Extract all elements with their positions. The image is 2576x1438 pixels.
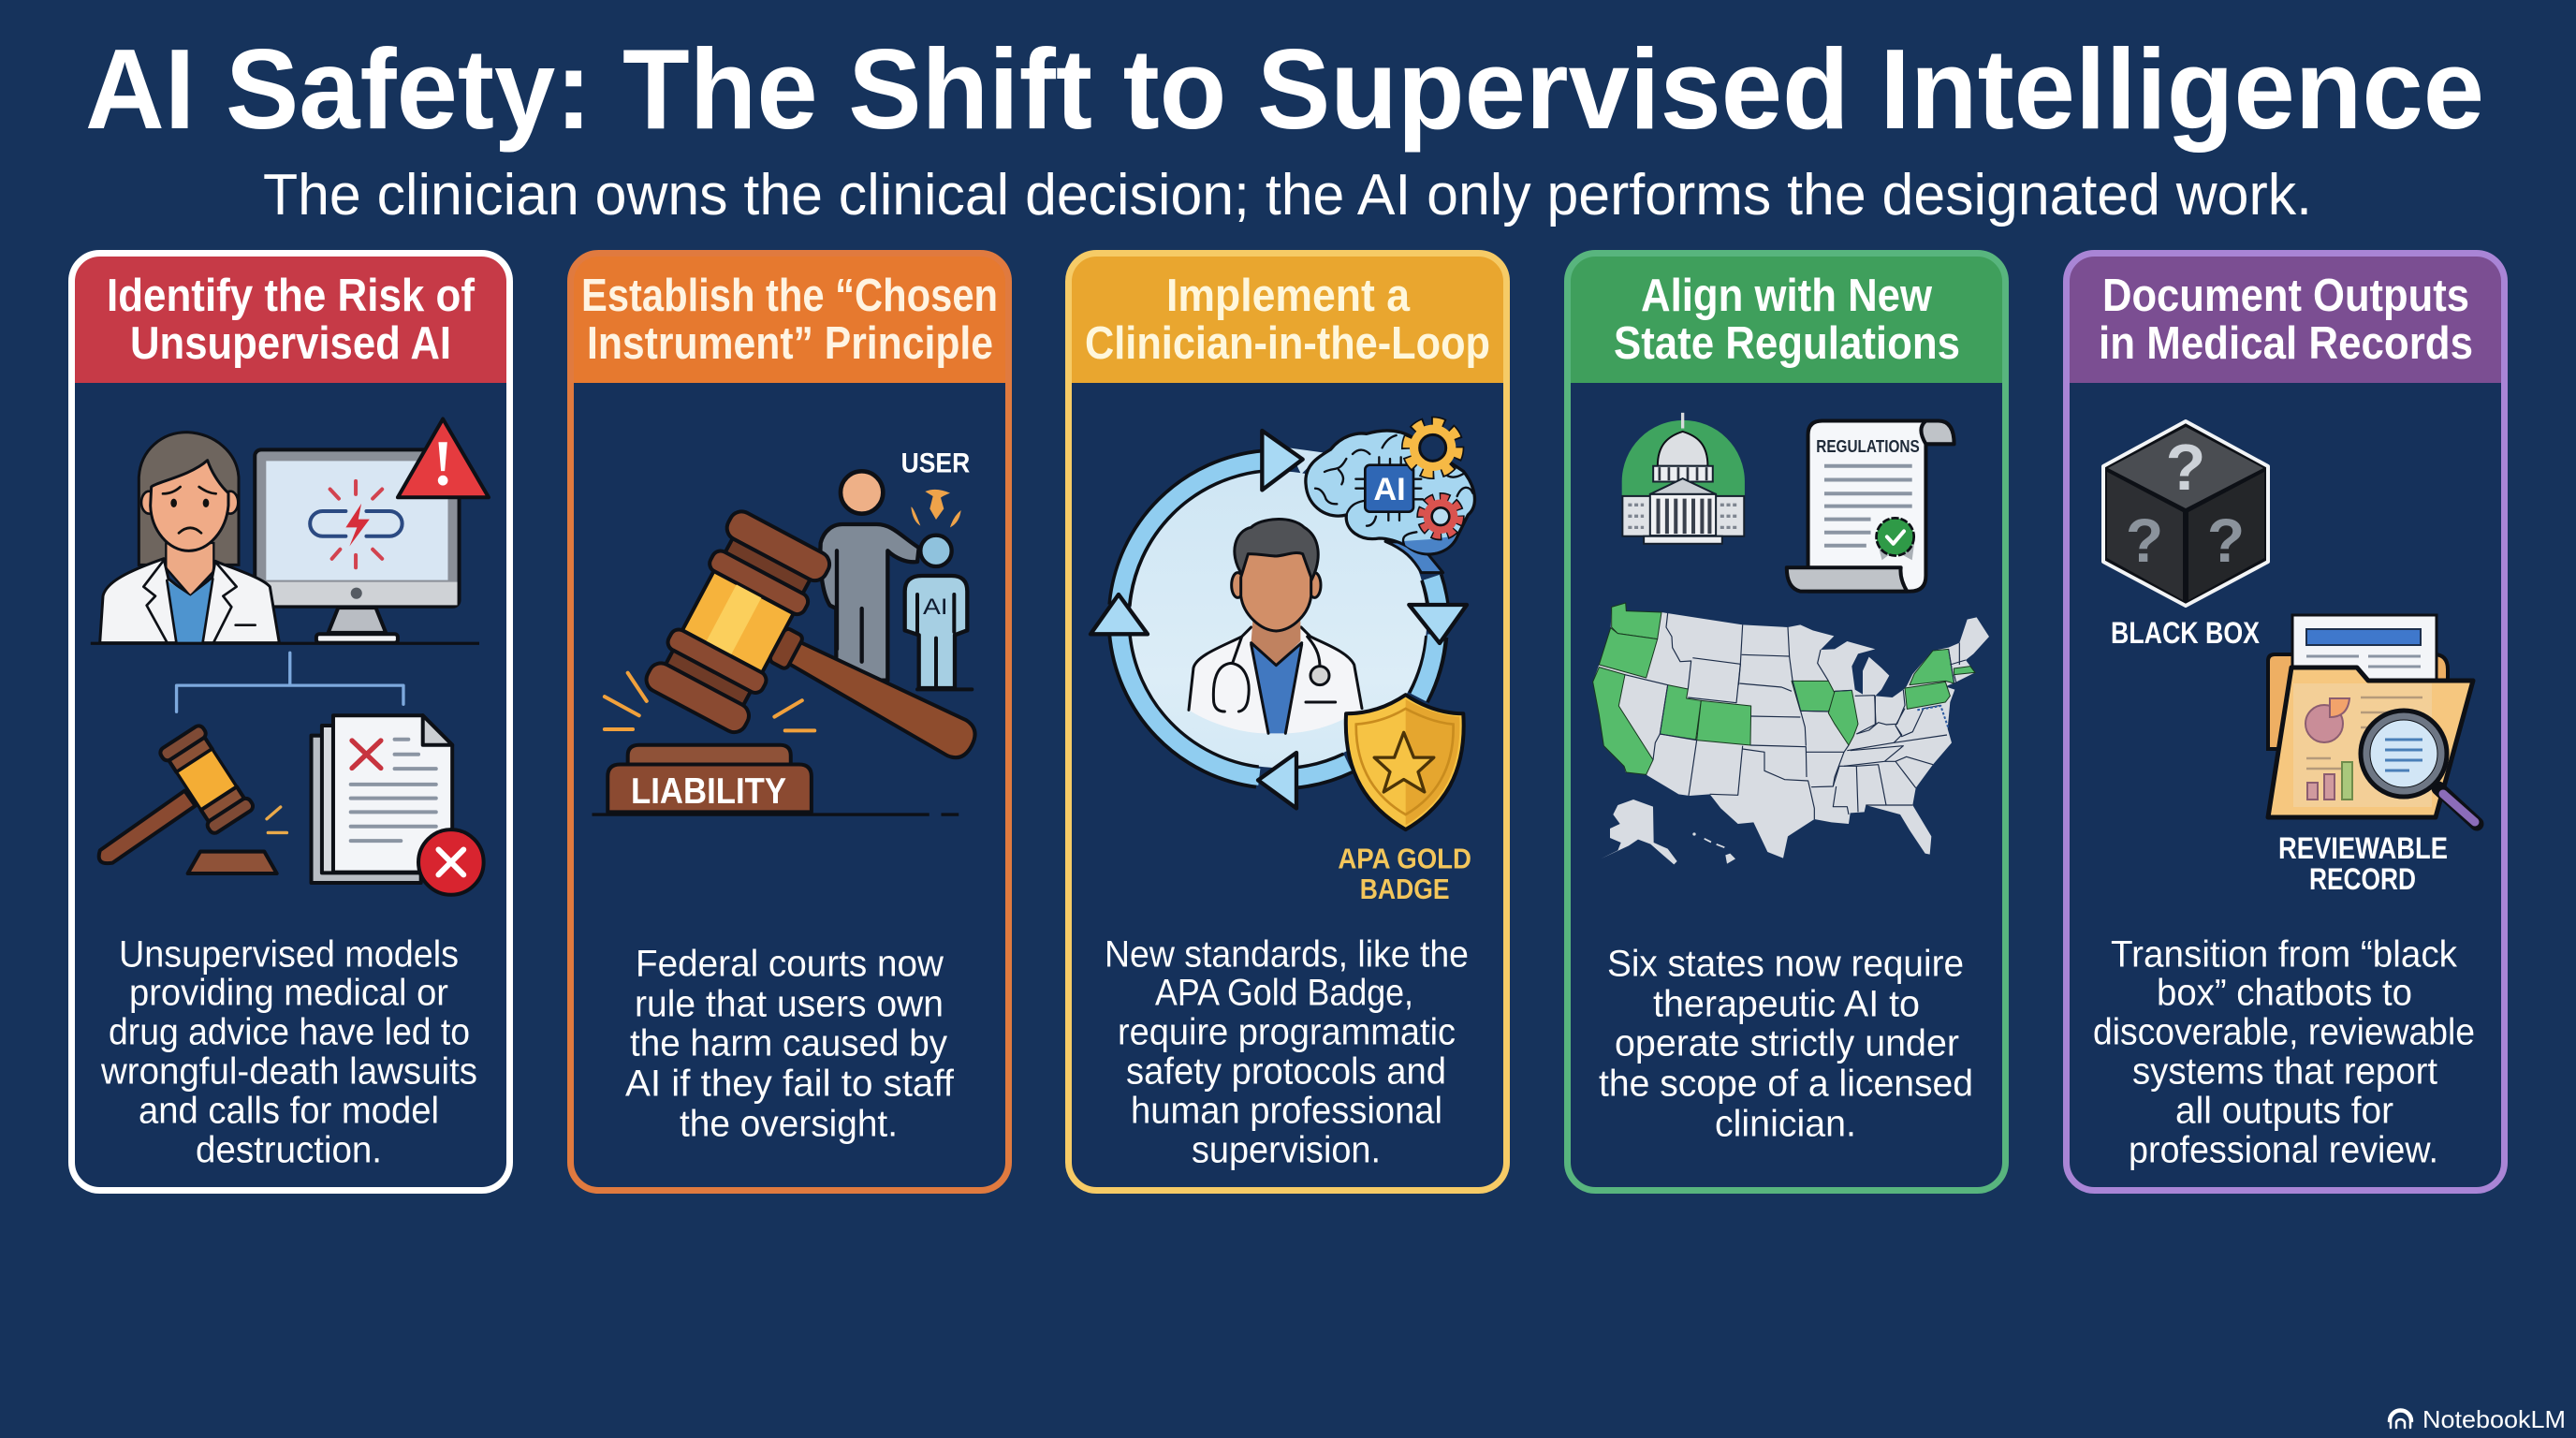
header band: yellow: [1068, 253, 1507, 383]
body text: APA Gold Badge,: [1155, 972, 1413, 1013]
heading: Implement a: [1166, 271, 1411, 321]
body text: safety protocols and: [1126, 1050, 1446, 1092]
icon: capitol building: [1622, 413, 1745, 544]
body text: the scope of a licensed: [1599, 1064, 1973, 1105]
body text: destruction.: [196, 1129, 382, 1170]
heading: [2099, 271, 2473, 369]
heading: Instrument” Principle: [587, 318, 993, 369]
body text: require programmatic: [1118, 1011, 1456, 1052]
map: United States with highlighted states: [1593, 603, 1989, 864]
body text: [625, 944, 955, 1144]
heading: [107, 271, 476, 369]
body text: systems that report: [2132, 1050, 2437, 1092]
icon: black box: ?: [2126, 506, 2163, 575]
illustration: gavel: [605, 507, 1018, 835]
body text: Unsupervised models: [119, 934, 459, 976]
body text: providing medical or: [129, 972, 448, 1013]
label: reviewable record: RECORD: [2309, 862, 2416, 896]
heading: [581, 271, 998, 369]
body text: the oversight.: [680, 1103, 898, 1144]
watermark: NotebookLM: NotebookLM: [2422, 1405, 2566, 1433]
header band: purple: [2066, 253, 2505, 383]
icon: black box: ?: [2166, 431, 2205, 504]
panel: medical records: [2066, 253, 2505, 1191]
label: APA gold badge: [1338, 843, 1471, 905]
body text: and calls for model: [139, 1090, 439, 1131]
body text: discoverable, reviewable: [2093, 1011, 2475, 1052]
body text: human professional: [1131, 1090, 1442, 1131]
body text: box” chatbots to: [2157, 972, 2412, 1013]
heading: Establish the “Chosen: [581, 271, 998, 321]
body text: Federal courts now: [636, 944, 944, 985]
body text: [2093, 934, 2475, 1170]
illustration: gavel and rejected document: [91, 643, 484, 895]
icon: gold badge shield: [1346, 695, 1464, 829]
heading: Identify the Risk of: [107, 271, 476, 321]
body text: operate strictly under: [1615, 1022, 1959, 1064]
heading: Unsupervised AI: [130, 318, 451, 369]
body text: [100, 934, 477, 1170]
heading: Document Outputs: [2102, 271, 2469, 321]
heading: in Medical Records: [2099, 318, 2473, 369]
icon: regulations scroll: [1787, 421, 1954, 592]
icon: black box: [2103, 421, 2268, 606]
label: APA gold badge: BADGE: [1360, 873, 1450, 905]
body text: drug advice have led to: [109, 1011, 470, 1052]
header band: orange: [570, 253, 1009, 383]
icon: AI brain with gears: AI: [1373, 472, 1406, 507]
body text: all outputs for: [2175, 1090, 2393, 1131]
illustration: liability block: [593, 448, 970, 814]
label: APA gold badge: APA GOLD: [1338, 843, 1471, 875]
heading: Clinician-in-the-Loop: [1085, 318, 1490, 369]
icon: regulations scroll: REGULATIONS: [1816, 436, 1920, 456]
illustration: liability block: USER: [901, 448, 970, 478]
body text: Transition from “black: [2111, 934, 2458, 976]
label: black box: BLACK BOX: [2111, 616, 2261, 650]
illustration: user and AI figures: [820, 471, 972, 689]
body text: the harm caused by: [630, 1022, 947, 1064]
heading: Align with New: [1641, 271, 1933, 321]
body text: supervision.: [1192, 1129, 1381, 1170]
icon: AI brain with gears: [1306, 422, 1474, 573]
illustration: broken AI monitor: [255, 419, 489, 643]
panel: state regulations: [1567, 253, 2006, 1191]
illustration: liability block: LIABILITY: [631, 771, 786, 812]
body text: [1105, 934, 1469, 1170]
icon: black box: ?: [2207, 506, 2245, 575]
illustration: user and AI figures: AI: [923, 594, 948, 620]
body text: New standards, like the: [1105, 934, 1469, 976]
body text: clinician.: [1715, 1103, 1856, 1144]
label: reviewable record: [2278, 831, 2448, 896]
illustration: worried clinician: [100, 433, 279, 643]
panel: identify the risk: [71, 253, 510, 1191]
subtitle: The clinician owns the clinical decision; the AI only performs the designated work.: [263, 163, 2312, 227]
heading: [1085, 271, 1490, 369]
body text: rule that users own: [635, 983, 944, 1024]
body text: Six states now require: [1607, 944, 1964, 985]
heading: State Regulations: [1614, 318, 1960, 369]
body text: professional review.: [2129, 1129, 2438, 1170]
body text: [1599, 944, 1973, 1144]
panel: chosen instrument: [570, 253, 1018, 1191]
label: reviewable record: REVIEWABLE: [2278, 831, 2448, 865]
panel: clinician in the loop: [1068, 253, 1507, 1191]
illustration: clinician inside loop: [1090, 431, 1467, 808]
body text: therapeutic AI to: [1653, 983, 1920, 1024]
title: AI Safety: The Shift to Supervised Intelligence: [85, 25, 2484, 153]
header band: green: [1567, 253, 2006, 383]
body text: AI if they fail to staff: [625, 1064, 955, 1105]
header band: red: [71, 253, 510, 383]
heading: [1614, 271, 1960, 369]
body text: wrongful-death lawsuits: [100, 1050, 477, 1092]
icon: reviewable record folder: [2268, 615, 2477, 824]
